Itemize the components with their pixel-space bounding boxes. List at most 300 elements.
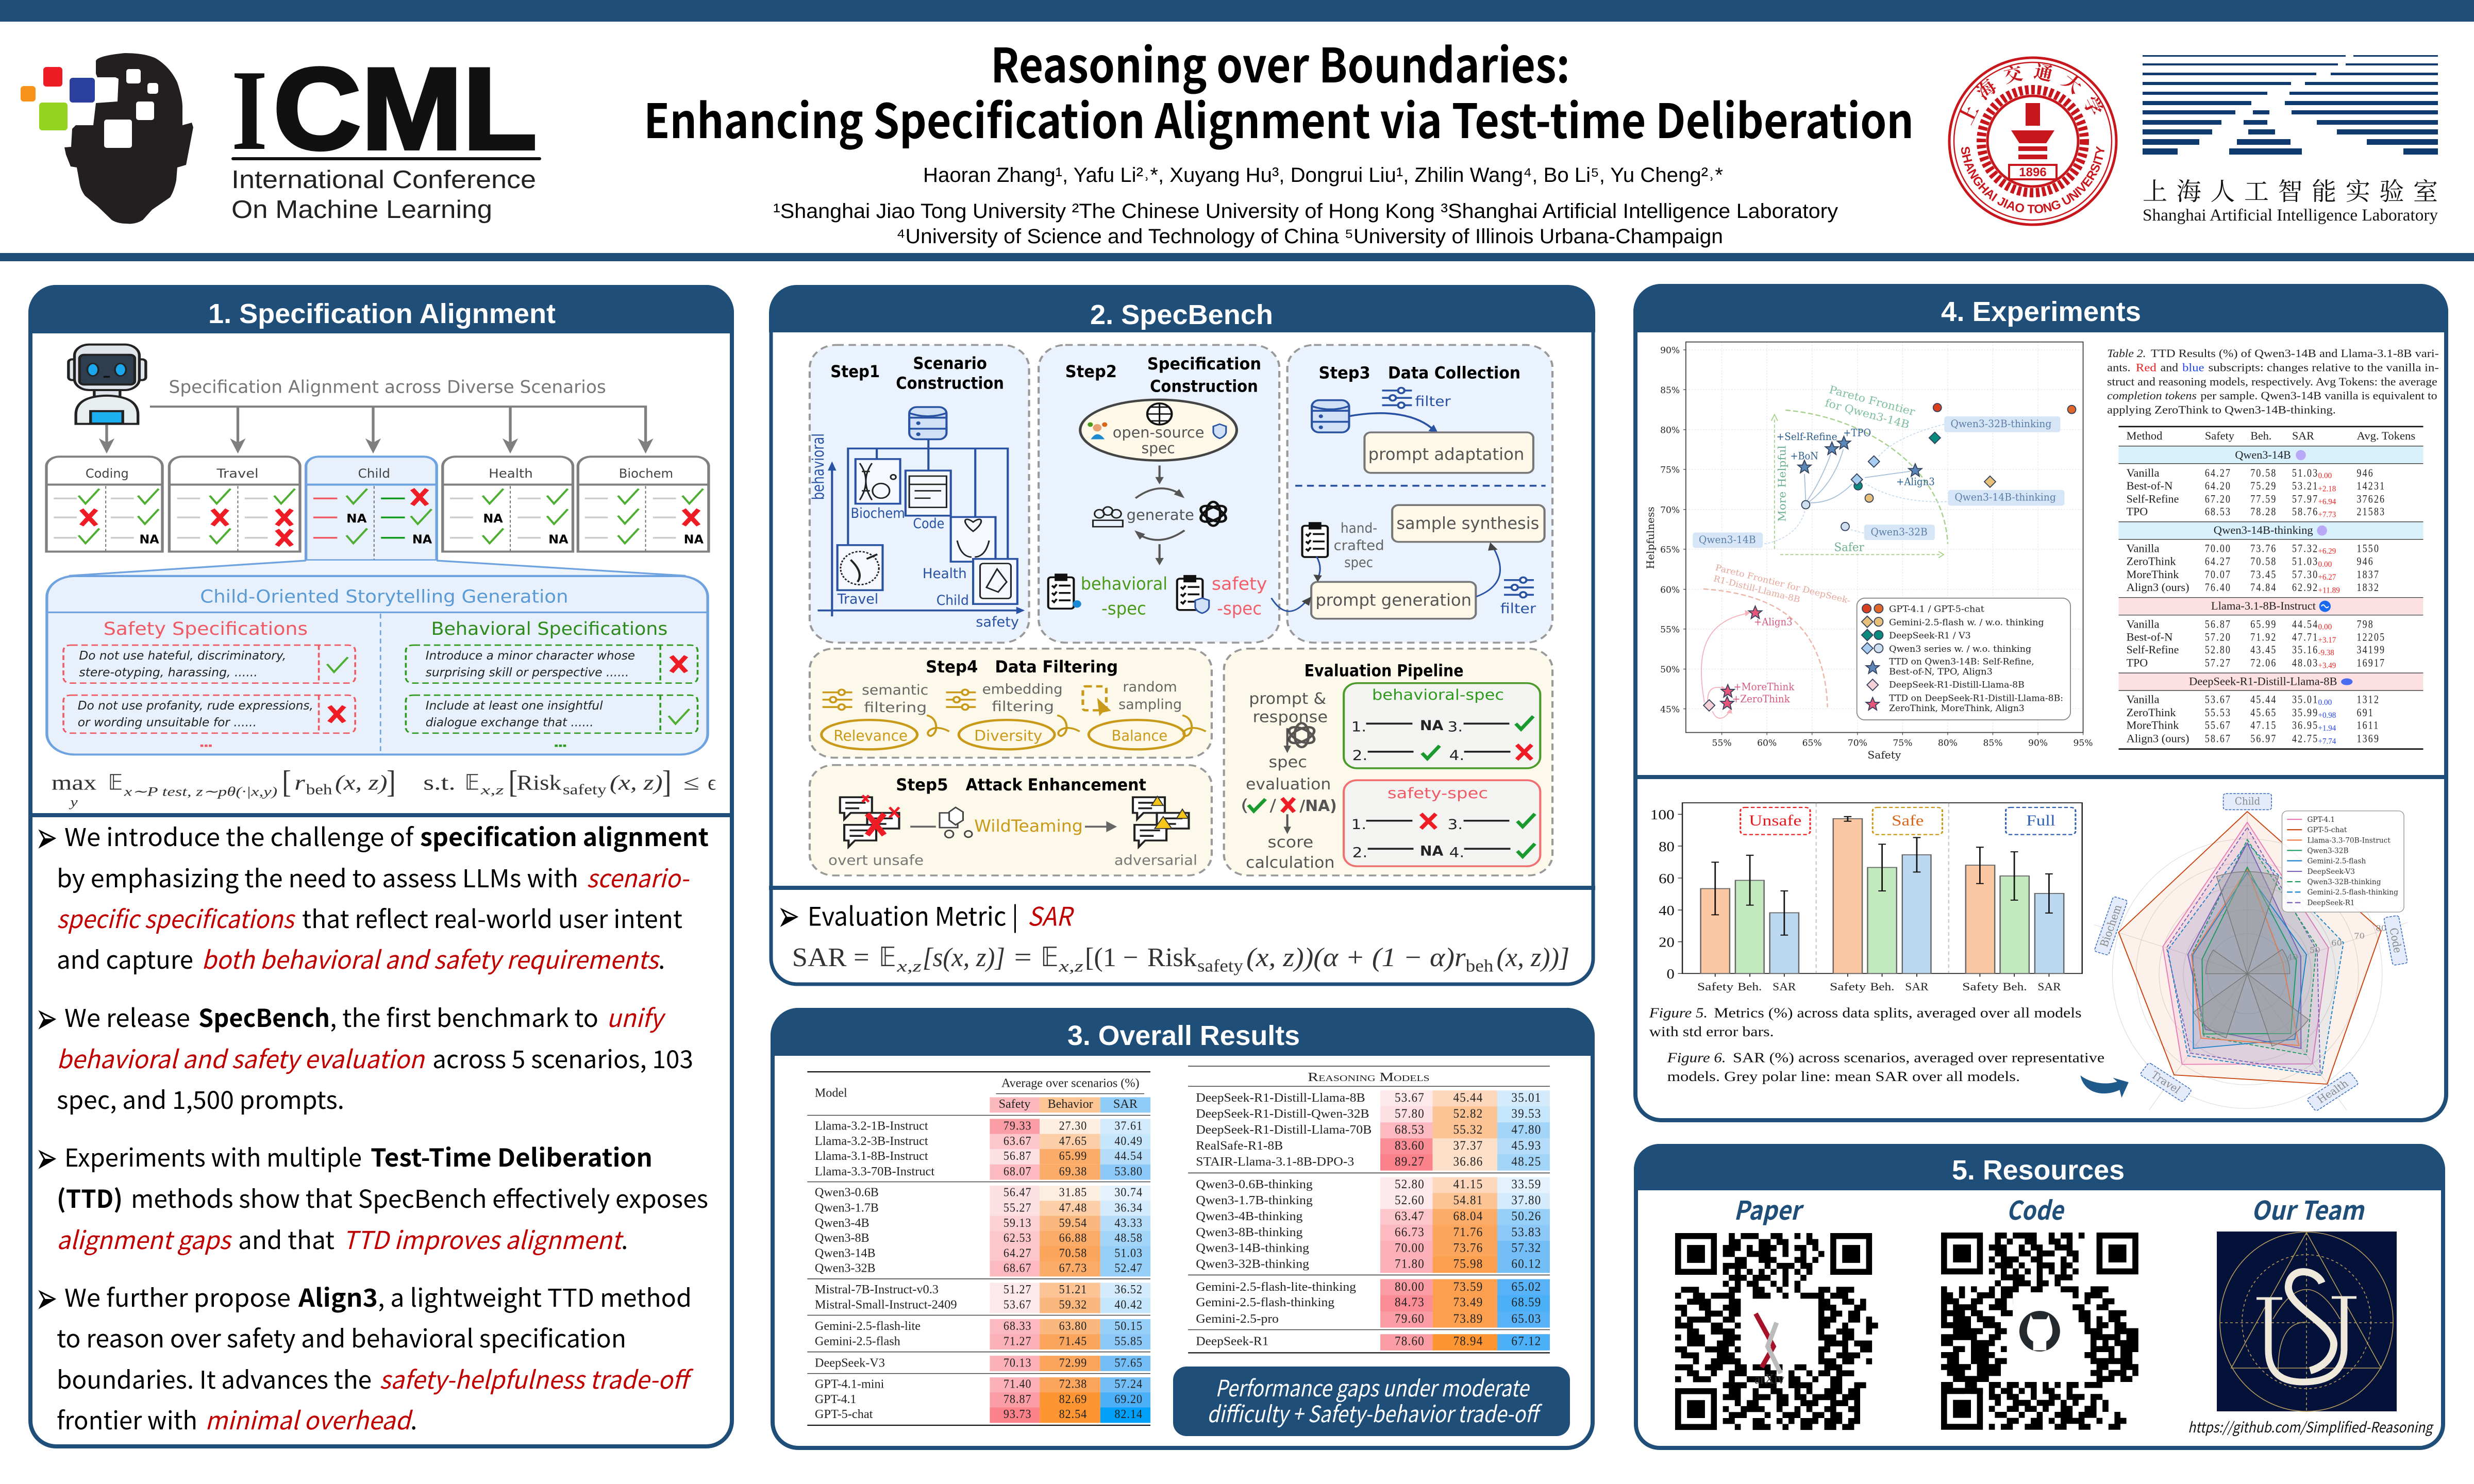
table: reasoning models: STAIR-Llama-3.1-8B-DPO-3 [1196,1154,1354,1168]
card: Health: NA [483,512,503,526]
group: Qwen3-14B rows: 58.76 [2292,505,2318,518]
table: reasoning models: Qwen3-8B-thinking [1196,1225,1303,1239]
title line two: Enhancing Specification Alignment via Test-time Deliberation [644,83,1914,152]
table caption: per sample. Qwen3-14B vanilla is equivalent to [2200,390,2437,402]
group: Qwen3-14B-thinking rows: 74.84 [2250,581,2277,594]
radar legend: DeepSeek-V3 [2307,867,2355,876]
table: instruct models: Gemini-2.5-flash [815,1334,900,1348]
table: reasoning models: 89.27 [1395,1154,1425,1169]
chart: metrics bar chart: SAR [2037,980,2061,993]
table: reasoning models: 84.73 [1395,1295,1425,1310]
formula: SAR: [(1 − [1085,943,1138,972]
group: Qwen3-14B-thinking rows: +6.29 [2318,548,2336,556]
axis tick labels: 85% [1660,385,1680,396]
table caption: completion tokens [2107,390,2197,402]
QR code: paper [1675,1236,1878,1427]
callout: key takeaway: difficulty + Safety-behavior trade-off [1207,1396,1543,1429]
table: reasoning models: RealSafe-R1-8B [1196,1138,1283,1152]
table: instruct models: 71.27 [1004,1334,1032,1348]
table: reasoning models: DeepSeek-R1 [1196,1334,1268,1348]
step 2: specification construction: -spec [1217,598,1262,619]
icons: model logos [2296,450,2352,685]
bullet: specification alignment: both behavioral and safety requirements [202,940,660,976]
bullet: test-time deliberation: (TTD) [57,1179,123,1215]
label: Our Team: Our Team [2251,1190,2365,1227]
step 5: attack enhancement: WildTeaming [974,817,1083,836]
step 4: data filtering: filtering [864,699,927,715]
evaluation pipeline: score [1267,833,1313,851]
formula: objective: Risk [517,770,562,795]
table: reasoning models: 45.93 [1511,1138,1541,1153]
bullet: specification alignment [40,817,709,976]
captions: figures [1649,1005,2104,1085]
bullet: SpecBench release: We release [64,998,190,1034]
radar legend: DeepSeek-R1 [2307,898,2355,907]
table: reasoning models: 57.80 [1395,1106,1425,1121]
chart: metrics bar chart [1650,803,2082,993]
step 5: attack enhancement: Attack Enhancement [966,775,1146,795]
step 2: specification construction: -spec [1101,598,1146,619]
table: instruct models: 56.87 [1004,1149,1032,1162]
green pareto frontier [1771,383,1948,558]
radar tick labels [2287,923,2386,962]
heading: 4. Experiments [1941,296,2141,327]
table: reasoning models: DeepSeek-R1-Distill-Qwen-32B [1196,1106,1369,1120]
group: Qwen3-14B-thinking rows: 73.76 [2250,543,2277,555]
scenario labels: Travel [2149,1069,2183,1095]
table: instruct models: 82.54 [1059,1407,1087,1421]
step 4: data filtering: Data Filtering [995,658,1118,677]
group: Llama rows: 16917 [2356,657,2385,669]
table: reasoning models: 80.00 [1395,1279,1425,1294]
group: Qwen3-14B-thinking rows: 70.07 [2205,568,2231,581]
group: DeepSeek rows: ZeroThink [2127,706,2176,719]
chart: metrics bar chart: Beh. [1737,980,1762,993]
group: Llama rows: 57.27 [2205,657,2231,669]
step 3: data collection: Step3 [1319,364,1370,383]
group: Qwen3-14B-thinking rows: 946 [2356,555,2374,568]
axis tick labels: 90% [1660,346,1680,356]
group: Qwen3-14B rows: Vanilla [2127,467,2160,479]
card: Child: Child [358,466,390,481]
legend: TTD on DeepSeek-R1-Distill-Llama-8B: [1889,693,2063,703]
step 4: data filtering: Relevance [833,727,908,745]
group: Llama rows: Best-of-N [2127,631,2172,644]
axis tick labels: 85% [1983,738,2003,748]
group: Qwen3-14B-thinking rows: 57.30 [2292,568,2318,581]
formula: SAR: 𝔼 [1041,943,1058,972]
text: ICML: I [231,46,268,174]
table: TTD results: Avg. Tokens [2356,430,2416,443]
bullet: specification alignment: . [658,940,665,976]
table caption: ants. [2107,362,2131,374]
diagram: SpecBench pipeline [782,345,1569,975]
step 1: scenario construction: Code [913,515,944,531]
diagram: specification alignment scenarios [46,345,716,810]
table caption: and [2161,362,2178,374]
step 4: data filtering: filtering [992,698,1054,715]
table: reasoning models: 45.44 [1453,1090,1483,1105]
group: DeepSeek rows: 36.95 [2292,719,2318,732]
point labels [1693,416,2064,705]
step 3: data collection: filter [1500,600,1536,617]
axis tick labels: 70% [1660,505,1680,515]
axis tick labels: Helpfulness [1645,507,1657,569]
evaluation pipeline: NA [1420,717,1444,733]
group: DeepSeek rows: 45.65 [2250,706,2277,719]
table: instruct models: 50.15 [1114,1319,1143,1333]
formula: objective: (x, z) [610,770,663,795]
table: instruct models: 59.54 [1059,1216,1087,1229]
chart: metrics bar chart: 80 [1659,839,1675,854]
group: Qwen3-14B-thinking rows: 0.00 [2318,561,2332,569]
axis tick labels: 95% [2074,738,2093,748]
group: Qwen3-14B rows: 53.21 [2292,480,2318,493]
bullet: test-time deliberation: Test-Time Deliberation [371,1138,653,1174]
chart: metrics bar chart: 0 [1666,966,1675,982]
table: reasoning models: 73.76 [1453,1241,1483,1255]
bullet: SpecBench release: unify [607,998,666,1034]
group: Qwen3-14B-thinking rows: 64.27 [2205,555,2231,568]
table: instruct models: 78.87 [1004,1392,1032,1406]
captions: figures: models. Grey polar line: mean SAR over all models. [1667,1069,2020,1085]
table: instruct models: 82.69 [1059,1392,1087,1406]
table: TTD results: SAR [2292,430,2315,443]
group: Llama rows: +3.17 [2318,636,2336,645]
axis tick labels: 55% [1712,738,1732,748]
table: instruct models: 66.88 [1059,1230,1087,1244]
card: Health: Health [489,466,533,481]
step 1: scenario construction: Child [937,592,969,608]
radar legend [2282,811,2404,912]
table: reasoning models: 35.01 [1511,1090,1541,1105]
table: instruct models [807,1072,1150,1425]
bottom header band [0,253,2474,261]
title line one: Reasoning over Boundaries: [991,28,1570,96]
label: Code: Code [2007,1190,2065,1227]
table: instruct models: Gemini-2.5-flash-lite [815,1319,921,1333]
bullet: SpecBench release: spec, and 1,500 prompts. [57,1080,344,1116]
evaluation pipeline: 1. [1351,719,1366,735]
scenario labels: Biochem [2097,903,2125,949]
radar legend: Qwen3-32B-thinking [2307,878,2381,886]
icon: stripes [2143,55,2438,155]
seal english text: SHANGHAI JIAO TONG UNIVERSITY [1961,146,2104,213]
evaluation pipeline: spec [1268,753,1307,771]
formula: objective: x∼P test, z∼pθ(·|x,y) [124,785,277,799]
table: instruct models: 67.73 [1059,1261,1087,1275]
table: reasoning models: Gemini-2.5-pro [1196,1311,1279,1325]
step 4: data filtering: semantic [862,682,928,698]
evaluation pipeline [1224,649,1552,875]
table: instruct models: 63.80 [1059,1319,1087,1333]
table: reasoning models: Qwen3-4B-thinking [1196,1209,1303,1223]
group: Qwen3-14B rows: 75.29 [2250,480,2277,493]
step 2: specification construction: spec [1142,440,1175,457]
formula: objective: x,z [480,783,504,797]
bullet: test-time deliberation: TTD improves alignment [343,1220,624,1256]
heading: 2. SpecBench [1090,299,1273,330]
formula: SAR: SAR = [792,943,870,972]
group: Qwen3-14B rows: +6.94 [2318,498,2336,507]
table: instruct models: 79.33 [1004,1119,1032,1133]
radar tick labels: 40 [2287,952,2298,962]
bullet: SpecBench release: across 5 scenarios, 103 [432,1039,693,1075]
legend: DeepSeek-R1 / V3 [1889,631,1971,641]
icon: arXiv [1754,1313,1784,1387]
table: TTD results: Safety [2205,430,2234,443]
heading: 3. Overall Results [1067,1020,1300,1051]
step 1: scenario construction: safety [976,614,1019,630]
axis tick labels: 45% [1660,704,1680,715]
group: Qwen3-14B-thinking rows: 1832 [2356,581,2380,594]
table: instruct models: 53.67 [1004,1297,1032,1311]
group: DeepSeek rows: 47.15 [2250,719,2277,732]
point labels: +ZeroThink [1732,693,1790,705]
step 3: data collection: Data Collection [1388,364,1520,383]
table: instruct models: 65.99 [1059,1149,1087,1162]
bullet: test-time deliberation: . [621,1220,628,1256]
step 4: data filtering: sampling [1118,696,1182,712]
scenario labels: Health [2315,1077,2351,1106]
group: Qwen3-14B rows: 70.58 [2250,467,2277,479]
arrows: robot to scenarios [99,407,654,453]
table: instruct models: SAR [1113,1097,1138,1110]
group: Qwen3-14B rows: 64.27 [2205,467,2231,479]
group: Llama rows: -9.38 [2318,649,2334,657]
chart: metrics bar chart: Safety [1697,980,1734,993]
table: instruct models: 57.65 [1114,1355,1143,1370]
bullet: Align3: . [410,1401,417,1437]
step 1: scenario construction: behavioral [809,433,827,500]
table caption: Red [2136,362,2157,374]
table: TTD results: Beh. [2250,430,2271,443]
table: reasoning models: 75.98 [1453,1257,1483,1271]
legend: ZeroThink, MoreThink, Align3 [1889,703,2025,714]
table: reasoning models: 68.59 [1511,1295,1541,1310]
group: Llama rows: 44.54 [2292,618,2318,631]
table: reasoning models: Qwen3-32B-thinking [1196,1257,1309,1271]
bullet: test-time deliberation: Experiments with multiple [64,1138,362,1174]
group: Llama rows: 48.03 [2292,657,2318,669]
formula: objective: ϵ [708,770,716,795]
step 4: data filtering: embedding [982,681,1063,697]
legend: GPT-4.1 / GPT-5-chat [1889,604,1984,615]
evaluation metric heading: Evaluation Metric | [808,896,1018,933]
step 2: specification construction: generate [1127,507,1194,524]
table: reasoning models: 60.12 [1511,1257,1541,1271]
evaluation pipeline: 3. [1448,719,1463,735]
table: instruct models: 64.27 [1004,1245,1032,1260]
point labels: +Self-Refine [1777,431,1837,443]
group: Qwen3-14B-thinking rows: MoreThink [2127,568,2179,581]
top header band [0,0,2474,22]
table: reasoning models: 83.60 [1395,1138,1425,1153]
step 3: data collection [1272,345,1552,643]
axis tick labels [1645,346,2093,761]
formula: objective [52,764,716,810]
table: reasoning models: 66.73 [1395,1225,1425,1239]
group: Qwen3-14B-thinking rows: 1837 [2356,568,2380,581]
axis tick labels: 80% [1660,426,1680,436]
panel: 4. Experiments [1633,284,2448,1120]
heading: 1. Specification Alignment [208,298,556,329]
group: Qwen3-14B rows: 946 [2356,467,2374,479]
logo: SJTU seal [1948,57,2117,226]
chart: metrics bar chart: 40 [1659,903,1675,919]
table caption: Table 2. [2107,347,2146,360]
group: DeepSeek rows: 35.99 [2292,706,2318,719]
authors: Haoran Zhang¹, Yafu Li²˒*, Xuyang Hu³, Dongrui Liu¹, Zhilin Wang⁴, Bo Li⁵, Yu Cheng²˒* [923,164,1723,187]
radar legend: Gemini-2.5-flash-thinking [2307,888,2398,897]
icon: arXiv: arXiv [1754,1371,1784,1387]
table: reasoning models: 37.80 [1511,1193,1541,1207]
table: instruct models: Mistral-7B-Instruct-v0.3 [815,1282,939,1296]
table: instruct models: Llama-3.2-1B-Instruct [815,1119,928,1133]
bullet: Align3: Align3 [298,1278,378,1314]
table caption: TTD Results (%) of Qwen3-14B and Llama-3.1-8B vari- [2151,347,2439,360]
table: instruct models: 70.13 [1004,1355,1032,1370]
group: Qwen3-14B rows: Self-Refine [2127,493,2179,505]
bullet: Align3: We further propose [64,1278,291,1314]
safety specification two: or wording unsuitable for ...... [78,716,257,729]
group: Llama rows: Vanilla [2127,618,2160,631]
table: instruct models: 36.34 [1114,1201,1143,1215]
group: DeepSeek rows: 55.53 [2205,706,2231,719]
bullet: specification alignment: specification alignment [420,817,709,853]
group: Qwen3-14B-thinking rows [2127,543,2380,595]
step 5: attack enhancement: adversarial [1114,852,1197,868]
table: reasoning models: Qwen3-1.7B-thinking [1196,1193,1313,1207]
step 1: scenario construction: Biochem [850,505,905,521]
table: reasoning models: 73.59 [1453,1279,1483,1294]
radar legend: GPT-4.1 [2307,815,2335,824]
panel: 1. Specification Alignment [28,285,734,1446]
point labels: Qwen3-14B [1699,534,1756,546]
table: instruct models: 68.33 [1004,1319,1032,1333]
table: instruct models: GPT-5-chat [815,1407,873,1421]
step 1: scenario construction: Scenario [913,354,987,373]
bullet: specification alignment: that reflect real-world user intent [302,899,682,935]
step 1: scenario construction: Travel [837,591,878,607]
group: Llama rows: 43.45 [2250,644,2277,656]
axis tick labels: 50% [1660,665,1680,675]
step 3: data collection: crafted [1333,537,1384,553]
table: reasoning models: 50.26 [1511,1209,1541,1223]
formula: objective: s.t. [423,770,456,795]
table: instruct models: Qwen3-14B [815,1245,876,1260]
group: Qwen3-14B-thinking rows: 70.00 [2205,543,2231,555]
axis tick labels: 90% [2028,738,2048,748]
legend: Best-of-N, TPO, Align3 [1889,667,1993,677]
table: instruct models: 37.61 [1114,1119,1143,1133]
box: child storytelling specifications [47,561,708,754]
text: lab chinese name: 上海人工智能实验室 [2143,172,2438,207]
table: reasoning models: 53.67 [1395,1090,1425,1105]
table: reasoning models: 70.00 [1395,1241,1425,1255]
group: Qwen3-14B-thinking rows: Vanilla [2127,543,2160,555]
bullet: specification alignment: and capture [57,940,193,976]
group: Qwen3-14B rows: 68.53 [2205,505,2231,518]
card: Child [306,457,437,560]
text: lab english name: Shanghai Artificial Intelligence Laboratory [2143,206,2438,225]
table: reasoning models: 73.49 [1453,1295,1483,1310]
formula: objective: safety [563,782,607,798]
group: DeepSeek rows: 1611 [2356,719,2379,732]
bullet: Align3: frontier with [57,1401,197,1437]
group: Qwen3-14B rows: +7.73 [2318,511,2336,519]
table: TTD results: Qwen3-14B [2235,449,2291,461]
captions: figures: with std error bars. [1649,1024,1774,1040]
table: instruct models: 44.54 [1114,1149,1143,1162]
group: Qwen3-14B-thinking rows: 57.32 [2292,543,2318,555]
group: DeepSeek rows: 58.67 [2205,733,2231,745]
group: Qwen3-14B rows: 37626 [2356,493,2385,505]
bullet: test-time deliberation: and that [238,1220,335,1256]
group: Qwen3-14B rows: +2.18 [2318,485,2336,494]
table: instruct models: 27.30 [1059,1119,1087,1133]
group: Qwen3-14B-thinking rows: +6.27 [2318,574,2336,582]
table: instruct models: 59.32 [1059,1297,1087,1311]
heading: scenarios: Specification Alignment across Diverse Scenarios [169,377,606,397]
bullet: specification alignment: by emphasizing the need to assess LLMs with [57,858,578,895]
green pareto frontier: for Qwen3-14B [1824,397,1911,431]
step 2: specification construction [1039,345,1279,643]
step 4: data filtering: Step4 [926,658,978,677]
formula: objective: 𝔼 [108,770,123,795]
axis tick labels: 65% [1802,738,1822,748]
evaluation pipeline: calculation [1246,853,1335,871]
behavioral specification one: surprising skill or perspective ...... [426,666,629,679]
group: Qwen3-14B rows: 77.59 [2250,493,2277,505]
radar tick labels: 50 [2310,946,2320,955]
formula: objective: (x, z) [335,770,388,795]
evaluation pipeline: prompt & [1249,689,1326,707]
formula: SAR: Risk [1147,943,1197,972]
panel: 2. SpecBench [769,285,1595,984]
ellipsis marks: ... [553,736,568,750]
radar tick labels: 60 [2331,938,2342,948]
card: Biochem: Biochem [619,466,673,481]
axis tick labels: 55% [1660,625,1680,635]
formula: SAR [792,943,1569,975]
table caption: subscripts: changes relative to the vanilla in- [2209,362,2439,374]
table: instruct models: DeepSeek-V3 [815,1355,885,1370]
logo: ICML [21,43,541,224]
group: Llama rows: 35.16 [2292,644,2318,656]
table: instruct models: Average over scenarios (%) [1001,1075,1140,1090]
point labels: Qwen3-32B [1871,526,1928,538]
bullet: test-time deliberation: methods show that SpecBench effectively exposes [131,1179,708,1215]
group: DeepSeek rows: MoreThink [2127,719,2179,732]
logo: Shanghai AI Laboratory [2143,55,2438,225]
panel: 5. Resources [1634,1144,2445,1448]
table: instruct models: 40.42 [1114,1297,1143,1311]
table: instruct models: Llama-3.2-3B-Instruct [815,1134,928,1148]
QR code: code [1941,1236,2138,1427]
table: instruct models: 55.85 [1114,1334,1143,1348]
group: Llama rows: 65.99 [2250,618,2277,631]
table: TTD results: Method [2127,430,2162,443]
bullet: Align3: minimal overhead [205,1401,413,1437]
group: Llama rows: 56.87 [2205,618,2231,631]
step 1: scenario construction: Construction [896,374,1004,393]
axis tick labels: 60% [1757,738,1777,748]
group: Qwen3-14B-thinking rows: 1550 [2356,543,2380,555]
ellipsis marks: ... [199,736,213,750]
group: Qwen3-14B rows: 78.28 [2250,505,2277,518]
axis tick labels: Safety [1867,749,1901,761]
